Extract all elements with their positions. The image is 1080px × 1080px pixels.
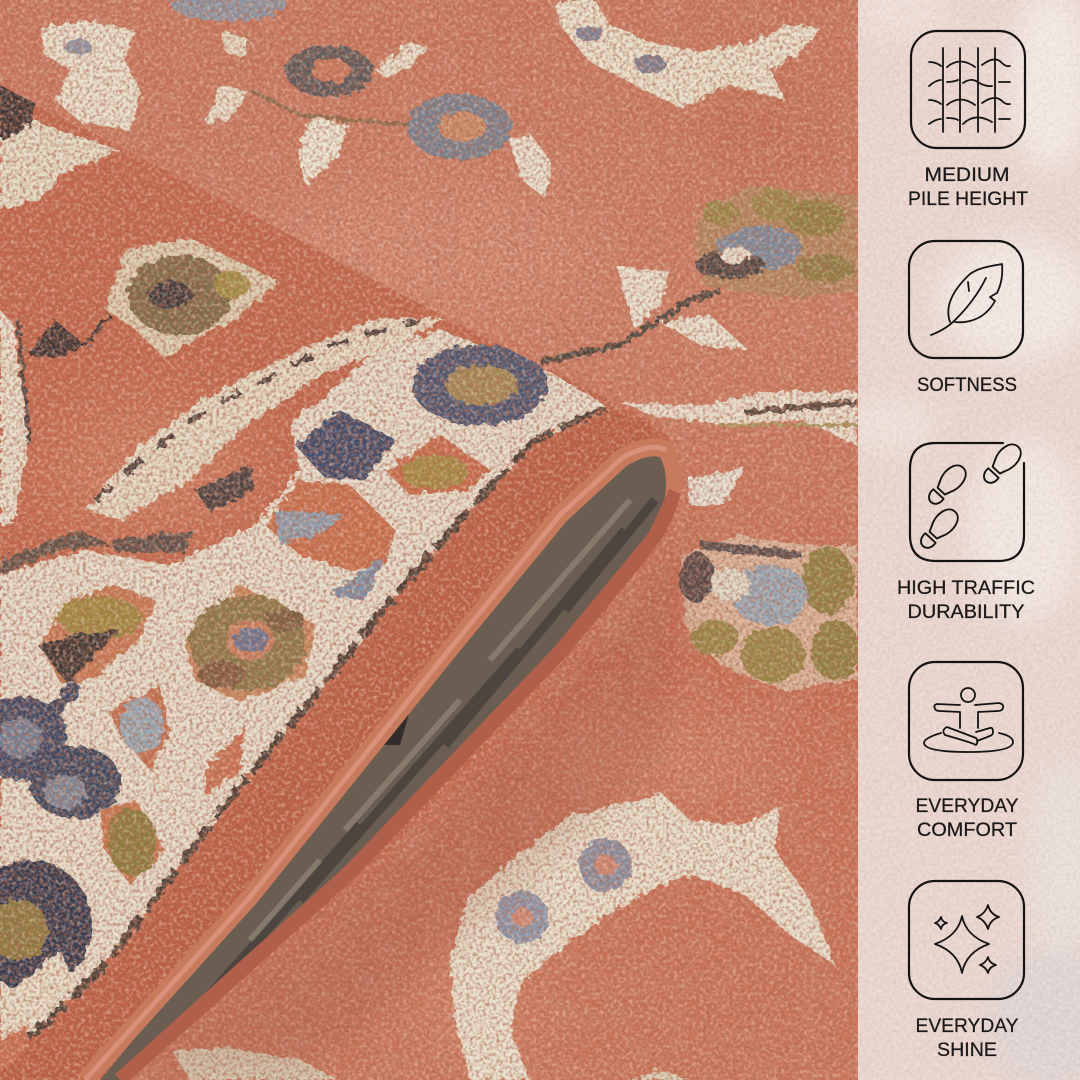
blue ring flower xyxy=(408,94,512,160)
blue cluster two xyxy=(29,746,121,818)
icon: feather softness xyxy=(909,241,1023,358)
icon: pile weave xyxy=(911,31,1025,148)
label: high traffic durability: DURABILITY xyxy=(908,602,1025,623)
light blue sprig xyxy=(275,510,345,545)
panel pale background xyxy=(845,0,1080,1080)
right olive flower xyxy=(695,185,857,298)
dark blue rosette bottom xyxy=(0,860,92,990)
blue left cluster xyxy=(0,696,68,780)
label: everyday comfort: EVERYDAY xyxy=(916,796,1019,817)
fold dark accent xyxy=(28,320,85,358)
label: medium pile height: MEDIUM xyxy=(924,165,1010,186)
label: high traffic durability: HIGH TRAFFIC xyxy=(897,578,1035,599)
bottom big cream crescent xyxy=(450,792,835,1080)
cream vine band xyxy=(85,318,445,520)
olive florets xyxy=(100,800,165,885)
label: everyday shine xyxy=(916,1016,1019,1061)
label: everyday comfort: COMFORT xyxy=(917,820,1017,841)
label: everyday comfort xyxy=(916,796,1019,841)
icon: meditating figure comfort xyxy=(909,662,1023,780)
right leaves and stem xyxy=(540,290,720,362)
bottom left vine xyxy=(172,1048,340,1080)
shadow under fold xyxy=(120,480,700,1080)
lower right flower xyxy=(690,468,745,505)
field highlights xyxy=(260,60,840,1060)
flat rug floral motifs xyxy=(40,0,859,1080)
cream lower border corner xyxy=(0,950,75,1040)
blue floret second xyxy=(295,410,395,480)
label: medium pile height xyxy=(908,165,1028,210)
label: medium pile height: PILE HEIGHT xyxy=(908,189,1028,210)
main cream border band xyxy=(0,330,605,1065)
dark ring flower xyxy=(285,45,373,97)
left cream strip xyxy=(0,310,28,525)
olive rosette xyxy=(185,585,315,702)
label: softness: SOFTNESS xyxy=(917,375,1017,396)
orange florals in border xyxy=(265,480,395,570)
top blue-grey flower xyxy=(170,0,286,21)
upper-left dark cream corner xyxy=(0,118,120,210)
fold terracotta base xyxy=(0,80,700,1080)
outer dark edge of border xyxy=(0,408,605,1068)
blue floret top xyxy=(412,345,548,425)
horizontal cream vine xyxy=(620,392,857,445)
top cream spray xyxy=(555,0,820,108)
binding edge xyxy=(85,447,675,1080)
flat rug terracotta field xyxy=(0,0,858,1080)
grey underside of rug xyxy=(100,450,676,1080)
outer terracotta band of fold xyxy=(0,412,660,1080)
mid-left light blue sprig xyxy=(108,685,170,770)
icon: sparkles shine xyxy=(909,881,1024,999)
label: everyday shine: SHINE xyxy=(937,1040,997,1061)
label: high traffic durability xyxy=(897,578,1035,623)
icon: footprints durability xyxy=(910,440,1025,561)
small cream leaves xyxy=(508,135,553,198)
left rosette xyxy=(40,585,155,682)
fold flower xyxy=(105,238,280,358)
rug photo background xyxy=(0,0,859,1080)
folded rug corner xyxy=(0,80,700,1080)
label: everyday shine: EVERYDAY xyxy=(916,1016,1019,1037)
right feature panel xyxy=(845,0,1080,1080)
upper left cream spray xyxy=(40,20,142,130)
